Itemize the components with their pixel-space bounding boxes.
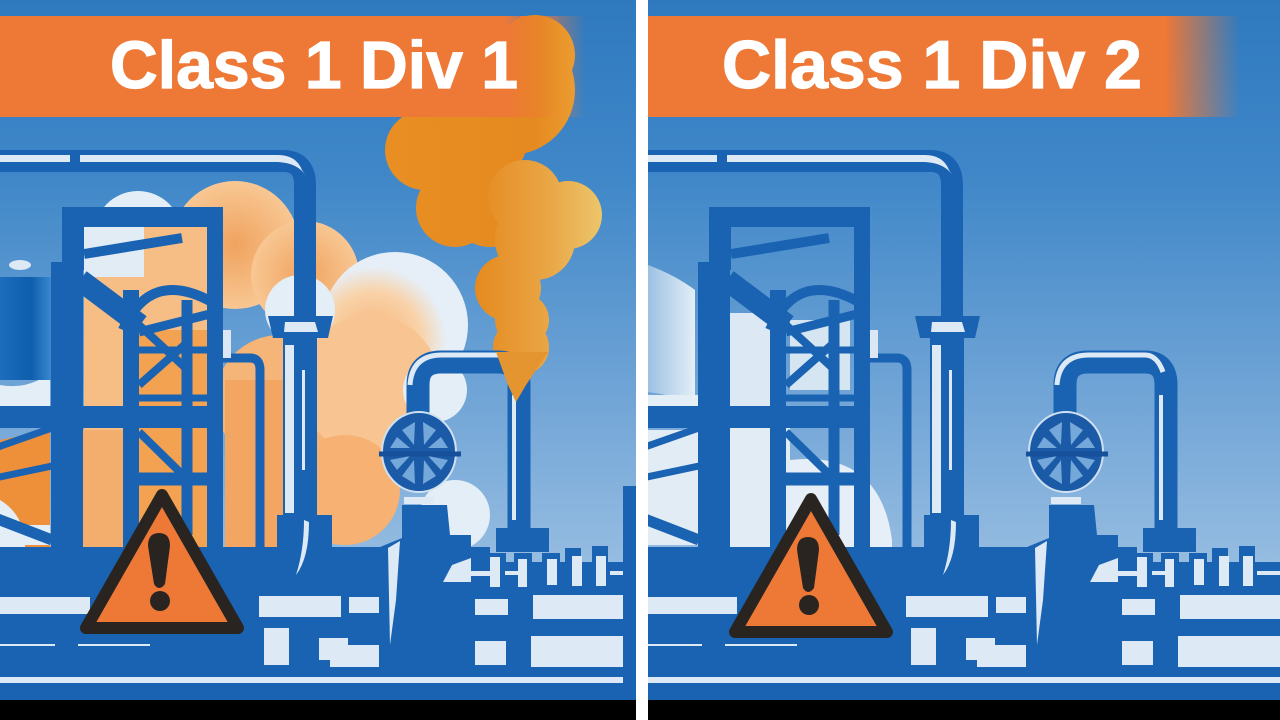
- plant: pipes, tower and valve: [642, 155, 1280, 700]
- pale vapor clouds behind plant: [648, 265, 892, 547]
- smoke tip over pipe: [496, 352, 548, 402]
- banner: left heading bar: [0, 16, 560, 117]
- plant: pipes, tower and valve: [0, 155, 640, 700]
- black footer bars: [0, 700, 1280, 720]
- sky background: [648, 0, 1280, 562]
- heading: Class 1 Div 2: Class 1 Div 2: [722, 27, 1142, 103]
- warning icon: [735, 499, 887, 632]
- banner: right heading bar: [648, 16, 1240, 117]
- banner fade: left heading bar end: [520, 16, 585, 117]
- heading: Class 1 Div 1: Class 1 Div 1: [110, 28, 518, 103]
- orange smoke plume: [385, 15, 602, 375]
- panel: Class 1 Div 2: [642, 0, 1280, 700]
- warning icon: [86, 495, 238, 628]
- vapor clouds behind plant: [0, 181, 490, 550]
- white divider: [636, 0, 648, 720]
- sky background: [0, 0, 636, 562]
- right edge column: [623, 486, 636, 700]
- storage tank: [0, 260, 52, 380]
- panel: Class 1 Div 1: [0, 0, 640, 700]
